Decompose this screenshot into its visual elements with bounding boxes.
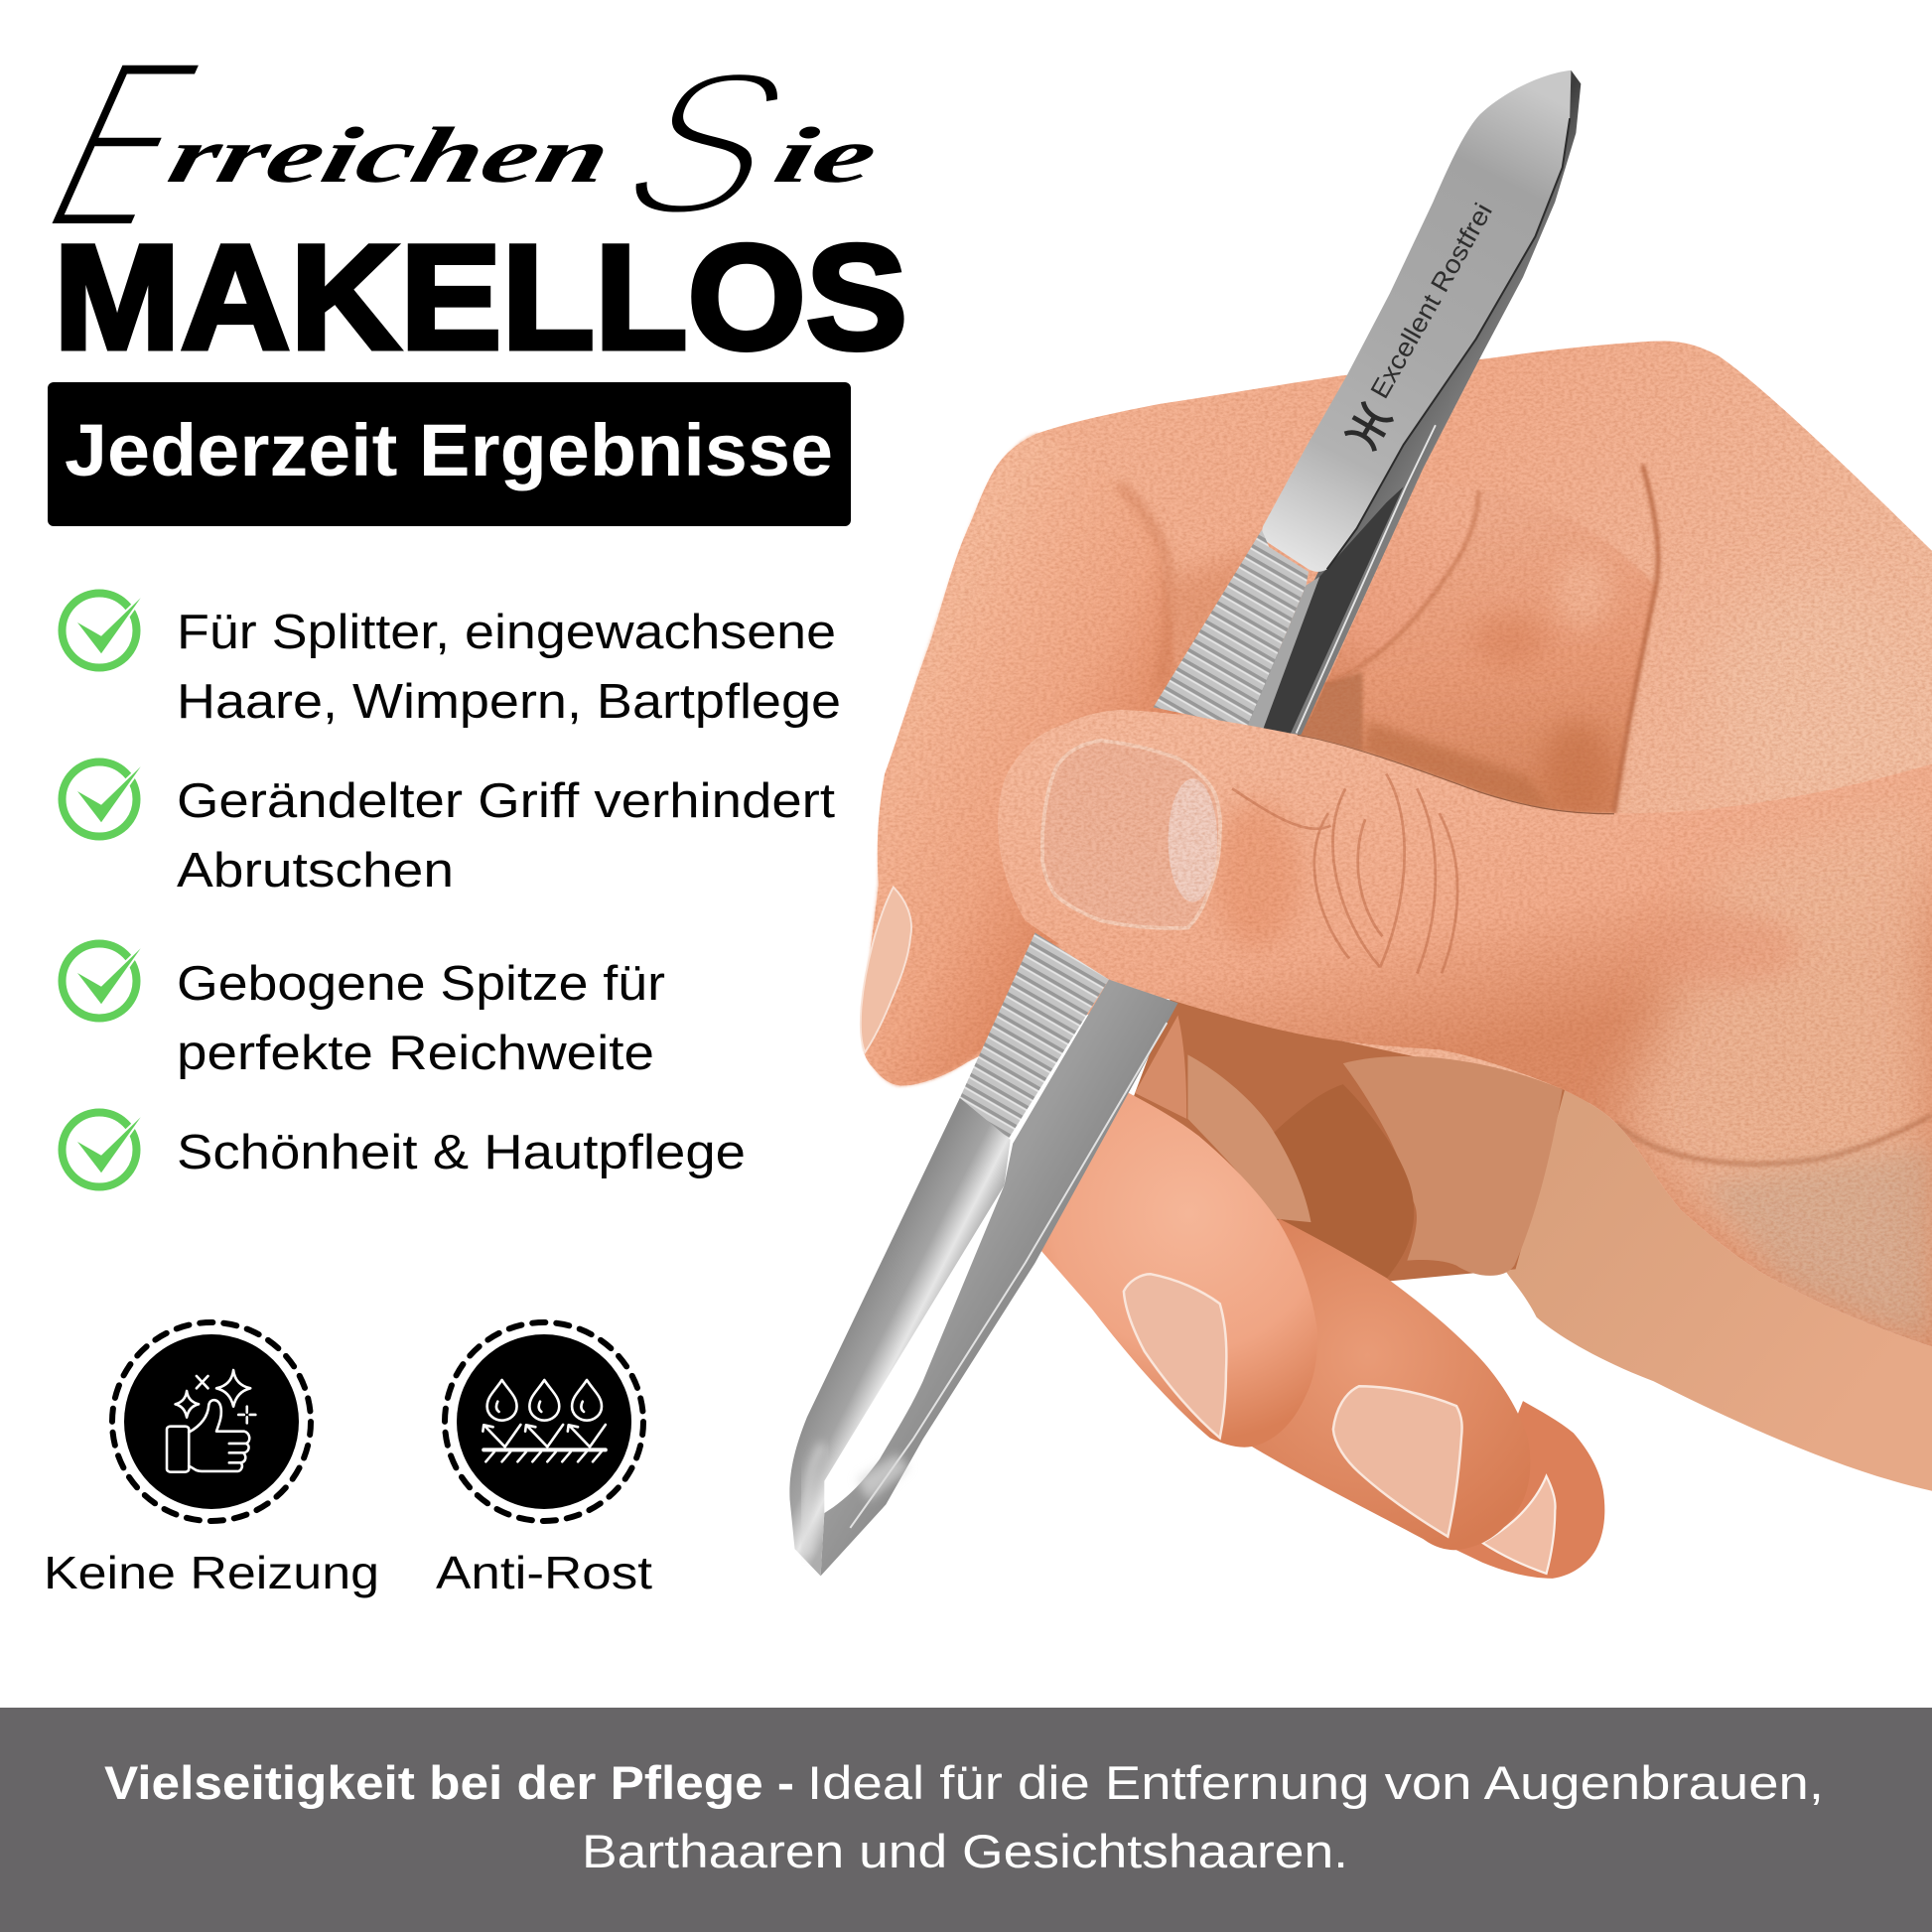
tweezers	[789, 70, 1581, 1576]
benefit 1: Haare, Wimpern, Bartpflege	[177, 675, 841, 729]
engraved logo	[1343, 401, 1394, 452]
benefit 2: Abrutschen	[177, 844, 454, 897]
tweezers: grip side band	[1247, 577, 1319, 730]
lobe shading	[1307, 477, 1478, 727]
benefit 2: Gerändelter Griff verhindert	[177, 774, 835, 828]
icon: water drops repelled from surface	[483, 1380, 606, 1461]
tweezers: blade edge lines	[850, 1023, 1167, 1528]
headline: script line: E	[11, 8, 237, 280]
hand: recessed folded fingers	[1134, 998, 1565, 1294]
footer text: Barthaaren und Gesichtshaaren.	[582, 1825, 1348, 1877]
tweezers: tip bend highlight	[857, 1453, 909, 1501]
tweezers: dark lower side wedge	[1263, 486, 1404, 735]
footer bar	[0, 1708, 1932, 1932]
footer text: Vielseitigkeit bei der Pflege -	[104, 1756, 794, 1809]
headline: script line: rreichen	[161, 111, 620, 200]
footer text	[104, 1756, 1824, 1877]
banner: Jederzeit Ergebnisse: Jederzeit Ergebnisse	[65, 409, 833, 491]
tweezers: lower ribbed grip	[960, 933, 1109, 1144]
headline: script line: S	[588, 29, 827, 259]
benefit list	[62, 594, 841, 1187]
footer text: Ideal für die Entfernung von Augenbrauen,	[807, 1756, 1824, 1809]
benefit 1	[62, 594, 841, 729]
tweezers: upper ribbed grip	[1154, 530, 1309, 727]
headline: MAKELLOS: MAKELLOS	[54, 213, 907, 380]
nail: index finger	[861, 888, 911, 1052]
icon: green check	[62, 943, 141, 1019]
nail: thumb	[1042, 741, 1220, 928]
finger: middle	[1041, 1093, 1317, 1448]
shadow piece beside tweezers	[1294, 671, 1363, 755]
badge: Keine Reizung	[44, 1322, 379, 1598]
benefit 3	[62, 943, 665, 1080]
icon: green check	[62, 594, 141, 667]
tweezers: left arm	[789, 1098, 1011, 1576]
hand: back of hand and index finger	[862, 342, 1932, 1347]
benefit 2	[62, 762, 835, 897]
tweezers: right blade	[821, 980, 1177, 1576]
tweezers: thin highlight on side	[1297, 425, 1436, 733]
tweezers: tip highlight	[806, 1445, 823, 1555]
tweezers: dark side of upper end	[1232, 70, 1581, 745]
benefit 4	[62, 1112, 746, 1187]
icon: green check	[62, 762, 141, 836]
finger: pinky	[1456, 1401, 1604, 1579]
hand: heel of palm	[1478, 1084, 1932, 1491]
icon: thumbs up with sparkles	[167, 1370, 255, 1472]
headline: script line	[11, 8, 887, 280]
tweezers: brushed top face with engraving	[1262, 70, 1571, 572]
banner: Jederzeit Ergebnisse	[48, 382, 851, 526]
recess between fingers and knuckle	[1290, 490, 1656, 813]
badge: Anti-Rost: Anti-Rost	[436, 1547, 652, 1598]
headline: script line: ie	[766, 111, 887, 200]
badge: Anti-Rost	[436, 1322, 652, 1598]
engraved text: Excellent Rostfrei	[1364, 198, 1498, 403]
thumb knuckle wrinkles	[1232, 773, 1457, 973]
icon: green check	[62, 1112, 141, 1187]
benefit 3: Gebogene Spitze für	[177, 957, 665, 1011]
badge: Keine Reizung: Keine Reizung	[44, 1547, 379, 1598]
benefit 1: Für Splitter, eingewachsene	[177, 606, 836, 659]
benefit 4: Schönheit & Hautpflege	[177, 1126, 746, 1179]
benefit 3: perfekte Reichweite	[177, 1027, 654, 1080]
illustration: hand holding tweezers	[789, 70, 1932, 1579]
hand: thumb	[998, 710, 1932, 1347]
finger: ring	[1232, 1218, 1530, 1550]
